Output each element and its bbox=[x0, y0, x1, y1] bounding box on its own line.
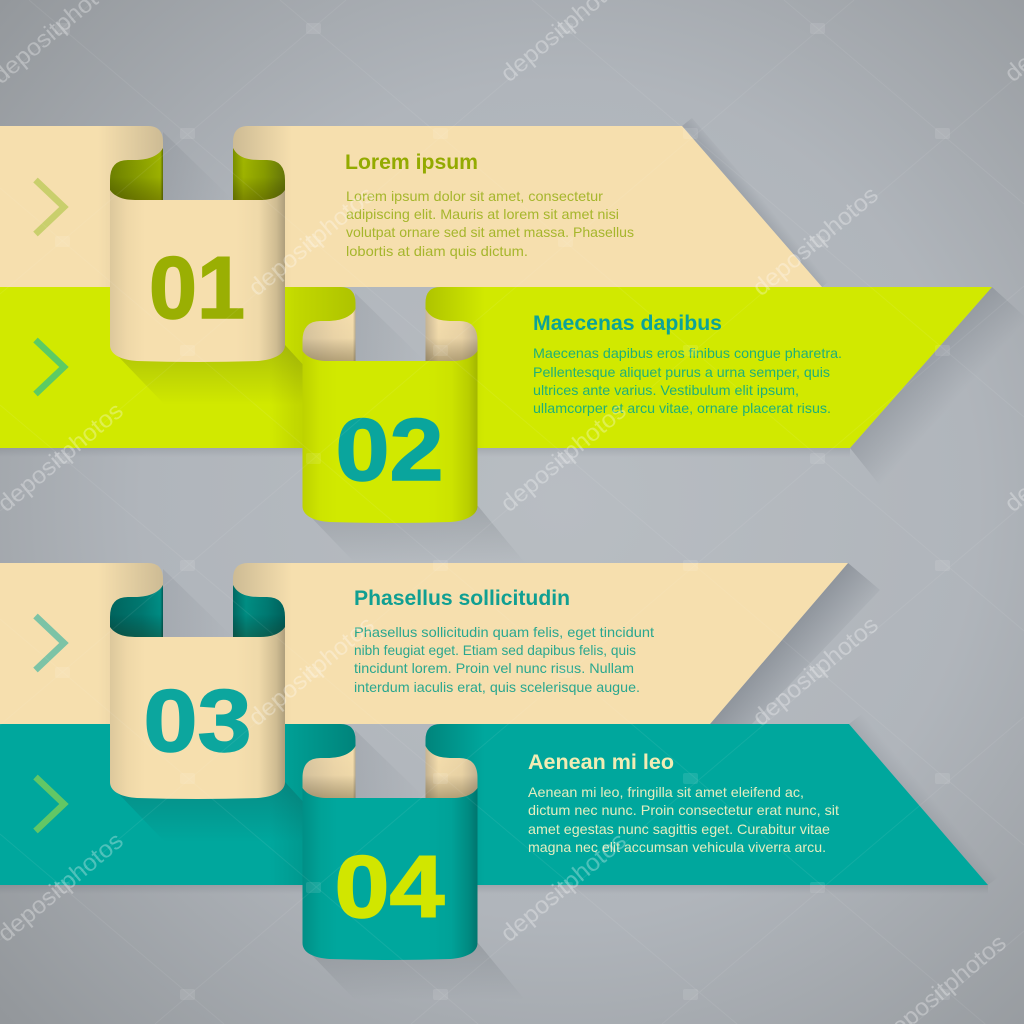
icon: chevron 1 bbox=[36, 180, 64, 234]
icon: chevron 2 bbox=[36, 340, 64, 394]
text block 3: interdum iaculis erat, quis scelerisque augue. bbox=[354, 679, 640, 695]
panel: band 1 bbox=[0, 126, 822, 287]
text block 4: magna nec elit accumsan vehicula viverra arcu. bbox=[528, 839, 826, 855]
text block 2: Maecenas dapibus eros finibus congue pharetra. bbox=[533, 345, 842, 361]
panel: band 3 bbox=[0, 563, 848, 724]
text block 1: lobortis at diam quis dictum. bbox=[346, 243, 528, 259]
watermark text: depositphotos bbox=[496, 827, 632, 948]
text block 2: Pellentesque aliquet purus a urna semper, quis bbox=[533, 364, 830, 380]
text block 2: ultrices ante varius. Vestibulum elit ipsum, bbox=[533, 382, 799, 398]
watermark text: depositphotos bbox=[496, 397, 632, 518]
heading 1: Lorem ipsum bbox=[345, 151, 478, 174]
watermark text: depositphotos bbox=[244, 611, 380, 732]
text block 4: dictum nec nunc. Proin consectetur erat nunc, sit bbox=[528, 802, 839, 818]
text block 3: tincidunt lorem. Proin vel nunc risus. Nullam bbox=[354, 660, 634, 676]
text block 1: Lorem ipsum dolor sit amet, consectetur bbox=[346, 188, 603, 204]
text block 3: nibh feugiat eget. Etiam sed dapibus felis, quis bbox=[354, 642, 636, 658]
text block 3 bbox=[354, 587, 654, 695]
panel: band 4 bbox=[0, 724, 988, 885]
text block 2 bbox=[533, 312, 842, 416]
tag 1 shadow bbox=[114, 345, 340, 405]
panel: band 2 bbox=[0, 287, 992, 448]
tag 4 with number 04 bbox=[302, 746, 478, 960]
tag 2 with number 02 bbox=[302, 309, 478, 523]
band shadows bbox=[0, 118, 1024, 894]
text block 4 bbox=[528, 751, 839, 855]
tag 3 with number 03 bbox=[110, 585, 285, 799]
icon: chevron 3 bbox=[36, 616, 64, 670]
watermark text: depositphotos bbox=[748, 611, 884, 732]
heading 2: Maecenas dapibus bbox=[533, 312, 722, 335]
heading 4: Aenean mi leo bbox=[528, 751, 674, 774]
watermark text: depositphotos bbox=[748, 181, 884, 302]
tag 1 with number 01 bbox=[110, 148, 285, 362]
number 04: 04 bbox=[334, 837, 445, 936]
heading 3: Phasellus sollicitudin bbox=[354, 587, 570, 610]
text block 3: Phasellus sollicitudin quam felis, eget tincidunt bbox=[354, 624, 654, 640]
tag 4 shadow bbox=[307, 943, 525, 1000]
tag 3 shadow bbox=[114, 782, 340, 842]
icon: chevron 4 bbox=[36, 777, 64, 831]
watermark text: depositphotos bbox=[244, 181, 380, 302]
number 01: 01 bbox=[149, 238, 245, 337]
number 02: 02 bbox=[336, 400, 444, 499]
number 03: 03 bbox=[144, 671, 252, 770]
text block 1: adipiscing elit. Mauris at lorem sit amet nisi bbox=[346, 206, 619, 222]
text block 4: amet egestas nunc sagittis eget. Curabitur vitae bbox=[528, 821, 830, 837]
tag 2 shadow bbox=[307, 506, 525, 563]
text block 4: Aenean mi leo, fringilla sit amet eleifend ac, bbox=[528, 784, 804, 800]
text block 2: ullamcorper et arcu vitae, ornare placerat risus. bbox=[533, 400, 831, 416]
text block 1 bbox=[345, 151, 634, 259]
text block 1: volutpat ornare sed sit amet massa. Phasellus bbox=[346, 224, 634, 240]
